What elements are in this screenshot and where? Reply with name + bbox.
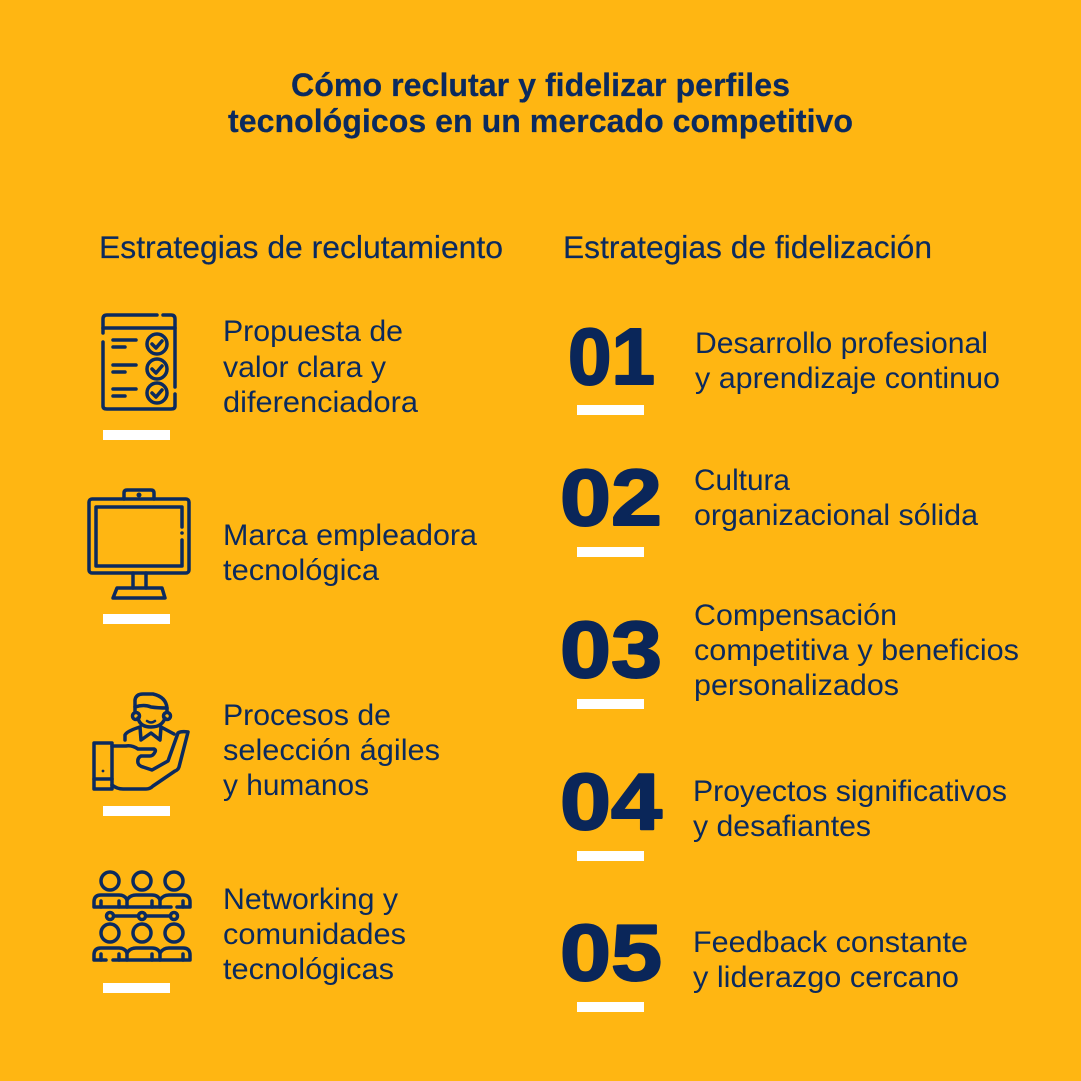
icon: monitor — [89, 490, 189, 598]
text: compensation: Compensación — [694, 599, 897, 632]
number 04: 04 — [560, 757, 663, 846]
text: networking: Networking y — [223, 883, 398, 916]
heading: recruitment strategies: Estrategias de reclutamiento — [99, 229, 503, 265]
text: value proposition — [223, 315, 418, 419]
text: feedback: y liderazgo cercano — [693, 961, 959, 994]
text: employer brand: Marca empleadora — [223, 519, 477, 552]
bar: item 4 — [103, 983, 170, 993]
text: employer brand — [223, 519, 477, 587]
text: selection processes: y humanos — [223, 769, 369, 802]
text: professional development: Desarrollo profesional — [695, 327, 988, 360]
text: meaningful projects: y desafiantes — [693, 810, 871, 843]
number 02: 02 — [560, 453, 662, 542]
text: compensation: competitiva y beneficios — [694, 634, 1019, 667]
text: meaningful projects: Proyectos significativos — [693, 775, 1007, 808]
text: organizational culture — [694, 464, 978, 532]
icon: audience community — [94, 872, 190, 960]
bar: item 3 — [103, 806, 170, 816]
icon: hand holding person — [94, 694, 188, 789]
text: feedback — [693, 926, 968, 994]
title: tecnológicos en un mercado competitivo — [228, 103, 853, 139]
text: value proposition: Propuesta de — [223, 315, 403, 348]
text: networking: comunidades — [223, 918, 406, 951]
bar: 02 — [577, 547, 644, 557]
number 05: 05 — [560, 908, 662, 997]
text: selection processes: Procesos de — [223, 699, 391, 732]
title: Cómo reclutar y fidelizar perfiles — [291, 67, 790, 103]
heading: retention strategies: Estrategias de fidelización — [563, 229, 932, 265]
text: organizational culture: Cultura — [694, 464, 790, 497]
text: professional development — [695, 327, 1000, 395]
bar: 01 — [577, 405, 644, 415]
bar: 03 — [577, 699, 644, 709]
title — [228, 67, 853, 139]
bar: 05 — [577, 1002, 644, 1012]
bar: item 2 — [103, 614, 170, 624]
bar: 04 — [577, 851, 644, 861]
number 03: 03 — [560, 605, 662, 694]
text: networking: tecnológicas — [223, 953, 394, 986]
text: networking — [223, 883, 406, 986]
text: professional development: y aprendizaje continuo — [695, 362, 1000, 395]
text: meaningful projects — [693, 775, 1007, 843]
text: selection processes: selección ágiles — [223, 734, 440, 767]
text: value proposition: diferenciadora — [223, 386, 418, 419]
text: compensation — [694, 599, 1019, 702]
text: employer brand: tecnológica — [223, 554, 379, 587]
text: organizational culture: organizacional sólida — [694, 499, 978, 532]
icon: checklist — [103, 315, 175, 409]
text: selection processes — [223, 699, 440, 802]
text: value proposition: valor clara y — [223, 351, 386, 384]
bar: item 1 — [103, 430, 170, 440]
text: feedback: Feedback constante — [693, 926, 968, 959]
text: compensation: personalizados — [694, 669, 899, 702]
number 01: 01 — [568, 312, 655, 401]
